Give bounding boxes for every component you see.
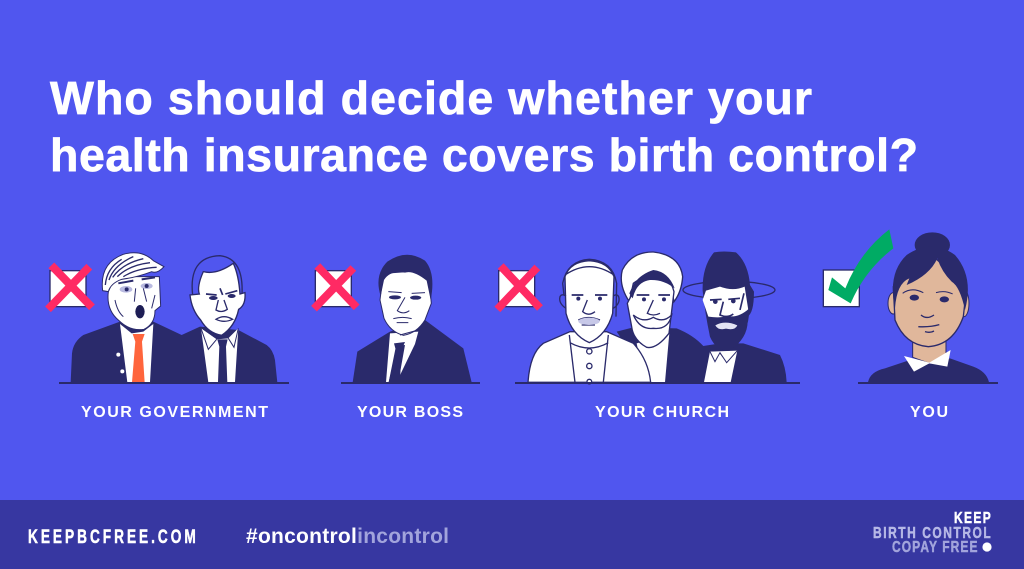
title: Who should decide whether your <box>50 72 812 124</box>
label: YOUR CHURCH <box>595 404 729 421</box>
checkbox with green check <box>823 229 893 307</box>
illustration: clergy <box>528 251 787 384</box>
baseline <box>858 382 998 384</box>
checkbox with red X <box>314 266 357 309</box>
title <box>50 72 918 181</box>
label: YOUR BOSS <box>357 404 463 421</box>
baseline <box>59 382 289 384</box>
hashtag: #oncontrolincontrol <box>246 525 449 548</box>
logo: COPAY FREE <box>892 537 978 555</box>
label: YOU <box>910 404 948 421</box>
logo: BIRTH CONTROL <box>873 523 991 541</box>
baseline <box>515 382 800 384</box>
website: KEEPBCFREE.COM <box>28 526 196 548</box>
baseline <box>341 382 480 384</box>
panel: your government <box>48 253 289 421</box>
illustration: politicians <box>71 253 277 382</box>
logo <box>873 508 992 555</box>
illustration: woman <box>868 232 989 382</box>
title: health insurance covers birth control? <box>50 129 918 181</box>
illustration: boss <box>353 255 472 382</box>
panel: your boss <box>314 255 480 421</box>
panel: your church <box>497 251 800 421</box>
panel: you <box>823 229 998 421</box>
label: YOUR GOVERNMENT <box>81 404 268 421</box>
checkbox with red X <box>497 266 540 309</box>
logo: KEEP <box>954 508 991 526</box>
footer band <box>0 500 1024 569</box>
checkbox with red X <box>48 265 92 309</box>
